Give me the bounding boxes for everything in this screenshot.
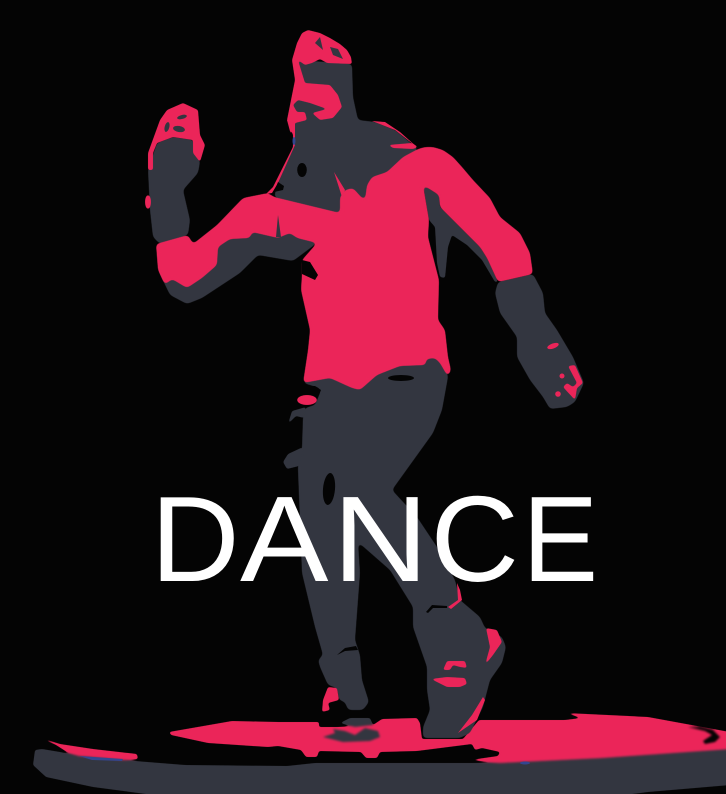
sleeve shadow — [158, 220, 317, 304]
neck and face shadow — [274, 60, 418, 220]
title: C — [430, 471, 519, 607]
left spotlight sliver — [42, 738, 138, 760]
hip highlight — [297, 395, 317, 405]
title: A — [240, 471, 329, 607]
dancer grey body — [148, 60, 584, 738]
platform spotlight — [169, 713, 726, 763]
title: E — [522, 471, 598, 607]
dancer pink highlights — [156, 147, 533, 390]
waist slit — [388, 375, 414, 381]
face highlight — [287, 30, 352, 135]
raised forearm and fist — [148, 137, 200, 244]
eye hole — [297, 163, 307, 177]
left heel highlight — [322, 687, 339, 712]
shadow arc on spotlight — [688, 727, 720, 744]
shoulder sliver — [388, 143, 418, 149]
face edge strip — [266, 120, 295, 194]
foot shadow oval — [340, 718, 373, 727]
knee crease — [426, 605, 447, 613]
fist highlight — [148, 103, 205, 170]
fist and head marks — [163, 37, 343, 237]
shoe logo top — [443, 661, 467, 670]
shirt — [156, 147, 533, 390]
black cut-outs — [274, 163, 447, 655]
hip notch — [303, 386, 321, 395]
stage platform — [33, 713, 726, 794]
thin pink details — [266, 120, 564, 733]
chest spike — [334, 172, 345, 197]
knee sliver — [448, 583, 462, 609]
thigh hole — [322, 473, 336, 505]
right heel highlight — [485, 628, 502, 665]
blue neck accent — [292, 137, 296, 145]
collar sliver — [372, 121, 418, 148]
arm hook shadow — [302, 260, 318, 280]
leg tendrils and underarm — [283, 185, 498, 469]
shoe sole stripe — [458, 697, 485, 733]
fingers highlight — [563, 365, 583, 400]
forearm spots — [547, 342, 559, 350]
title: N — [332, 471, 428, 607]
trousers and shoes — [298, 350, 506, 738]
platform base — [33, 749, 726, 794]
ankle crease — [337, 646, 358, 655]
lowered forearm and hand — [495, 274, 584, 409]
wrist highlight — [145, 195, 151, 209]
shoe logo bottom — [431, 677, 467, 687]
shadow under foot — [323, 728, 380, 742]
dancer figure — [145, 30, 584, 738]
title: D — [151, 471, 240, 607]
blue platform accents — [79, 756, 530, 764]
nose nub — [274, 182, 284, 192]
